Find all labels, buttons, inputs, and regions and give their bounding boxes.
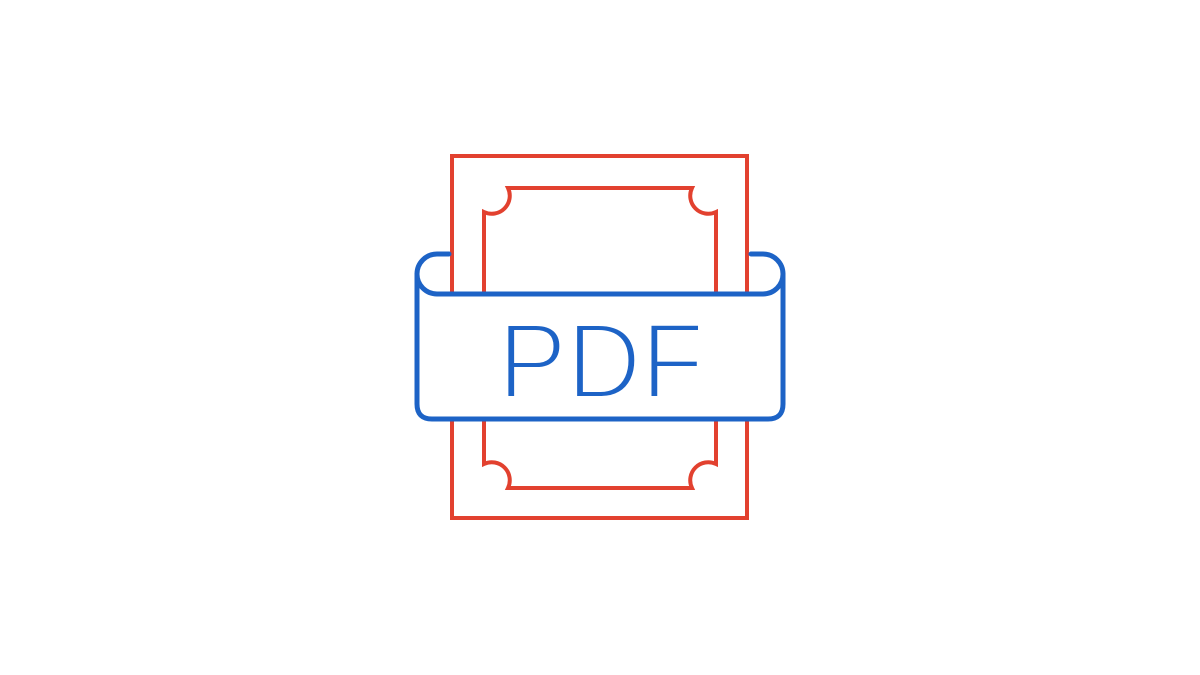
label text: PDF: PDF: [498, 300, 704, 421]
outer red page: [452, 156, 747, 518]
blue banner: [417, 254, 783, 419]
inner red frame: [484, 188, 716, 488]
